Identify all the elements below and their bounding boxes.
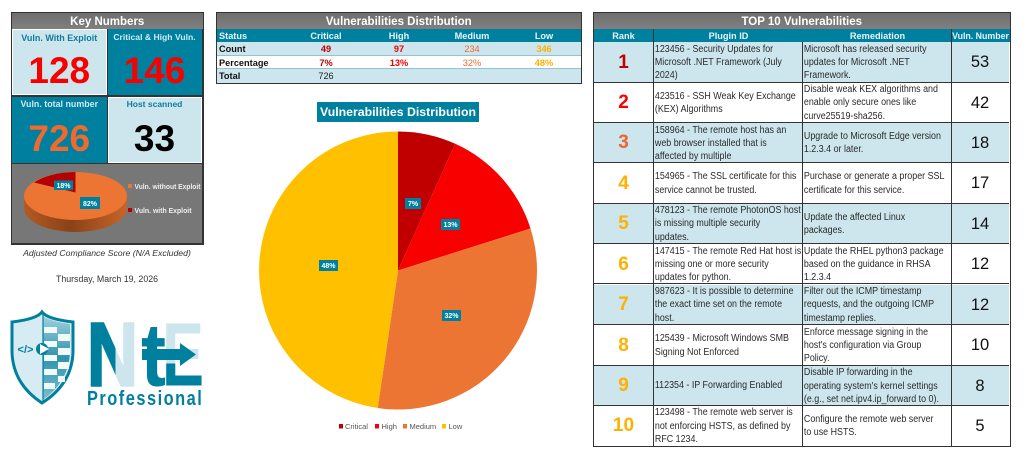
caption: compliance score: Adjusted Compliance Score (N/A Excluded) (23, 248, 191, 258)
row 10: RFC 1234. (655, 434, 698, 445)
table header: Plugin ID (709, 31, 748, 41)
row 1: updates for Microsoft .NET (804, 57, 910, 68)
row 8: Policy. (804, 353, 829, 364)
label: critical and high: Critical & High Vuln. (113, 32, 196, 42)
row 6: 12 (971, 255, 989, 273)
row: count: 234 (464, 44, 480, 54)
row 7: timestamp replies. (804, 313, 876, 324)
heading: distribution table: Vulnerabilities Distribution (326, 16, 472, 28)
row 9: 112354 - IP Forwarding Enabled (655, 380, 782, 391)
wordmark: t: t (141, 306, 166, 406)
row 10: Configure the remote web server (804, 414, 933, 425)
table header: Medium (455, 31, 489, 41)
number: 726: 726 (28, 118, 90, 159)
row: percentage (217, 56, 580, 69)
row 2: 42 (971, 94, 989, 112)
row 6: 1.2.3.4 (804, 272, 831, 283)
heading: top 10 (594, 13, 1010, 28)
row: total: Total (219, 71, 240, 81)
row 10 (594, 406, 1008, 445)
slice: low (259, 132, 398, 408)
label: vuln with exploit: Vuln. With Exploit (21, 33, 97, 43)
row 8: Enforce message signing in the (804, 327, 928, 338)
row 1: 2024) (655, 70, 678, 81)
panel: key numbers (11, 12, 204, 245)
heading: distribution table (217, 13, 580, 28)
row 7 (594, 284, 1008, 325)
data label: 13%: 13% (443, 222, 458, 229)
row 10: to use HSTS. (804, 427, 857, 438)
legend: Critical (345, 422, 368, 431)
row 2: Disable weak KEX algorithms and (804, 84, 938, 95)
chart title (317, 102, 479, 122)
row 1 (594, 42, 1008, 83)
row 6: missing one or more security (655, 259, 769, 270)
card: host scanned (108, 96, 202, 162)
label: host scanned: Host scanned (127, 99, 182, 109)
row 3: 18 (971, 134, 989, 152)
row 8: host's configuration via Group (804, 340, 921, 351)
heading: key numbers: Key Numbers (70, 16, 144, 28)
row 7: 987623 - It is possible to determine (655, 286, 793, 297)
row 8 (594, 325, 1008, 366)
legend (339, 422, 463, 431)
row 8: Signing Not Enforced (655, 347, 739, 358)
row: count (217, 42, 580, 56)
row 9: (e.g., set net.ipv4.ip_forward to 0). (804, 394, 939, 405)
row: percentage: Percentage (219, 58, 269, 68)
row 4: 154965 - The SSL certificate for this (655, 171, 796, 182)
data label: 48% (319, 260, 338, 271)
row 5: Update the affected Linux (804, 212, 905, 223)
row 9: 8 (975, 377, 985, 395)
wordmark: N: N (87, 306, 138, 406)
number: 128: 128 (28, 50, 90, 91)
chart: exploit pie (12, 164, 202, 243)
chart: exploit pie: 18% (56, 183, 71, 190)
table header: Rank (612, 31, 635, 41)
table header: High (389, 31, 409, 41)
row: count: 97 (394, 44, 404, 54)
row 7: the exact time set on the remote (655, 299, 782, 310)
heading: key numbers (12, 13, 202, 28)
row 2: 2 (618, 92, 629, 113)
row 7: requests, and the outgoing ICMP (804, 299, 934, 310)
row 5: is missing multiple security (655, 218, 760, 229)
heading: top 10: TOP 10 Vulnerabilities (741, 16, 862, 28)
icon: shield (12, 312, 73, 403)
row 7: 7 (618, 294, 629, 315)
row 6: Update the RHEL python3 package (804, 246, 944, 257)
row 9: operating system's kernel settings (804, 380, 938, 392)
row 6: updates for python. (655, 272, 731, 283)
row 3: 1.2.3.4 or later. (804, 144, 863, 155)
date: Thursday, March 19, 2026 (56, 274, 158, 284)
row 6: based on the guidance in RHSA (804, 259, 931, 270)
legend: High (382, 422, 397, 431)
number: 146: 146 (124, 50, 185, 91)
row: percentage: 7% (319, 58, 333, 68)
row 4: 4 (618, 173, 629, 194)
chart: exploit pie: 82% (83, 201, 98, 208)
row 3 (594, 123, 1008, 163)
number: 33: 33 (134, 118, 175, 159)
row 2: enable only secure ones like (804, 97, 916, 108)
row 10: not enforcing HSTS, as defined by (655, 421, 790, 432)
row 4: service cannot be trusted. (655, 185, 757, 196)
slice: medium (378, 228, 537, 409)
wordmark: Professional: Professional (87, 386, 202, 409)
legend: Low (448, 422, 463, 431)
legend: Medium (410, 422, 436, 431)
row 4: certificate for this service. (804, 185, 904, 196)
row 4: Purchase or generate a proper SSL (804, 171, 944, 182)
table header: Critical (310, 31, 342, 41)
row 1: 1 (618, 52, 629, 73)
row 9 (594, 366, 1008, 406)
row 1: Microsoft has released security (804, 44, 927, 55)
row 8: 8 (618, 335, 629, 356)
icon: arrow (142, 343, 196, 366)
row 7: 12 (971, 296, 989, 314)
row 10: 5 (975, 417, 985, 435)
card: total number (12, 96, 106, 162)
row 1: 53 (971, 53, 989, 71)
row 1: Microsoft .NET Framework (July (655, 57, 782, 68)
row 2: curve25519-sha256. (804, 111, 885, 122)
row 5 (594, 204, 1008, 244)
row 1: 123456 - Security Updates for (655, 44, 773, 55)
row 8: 125439 - Microsoft Windows SMB (655, 333, 789, 344)
row 9: 9 (618, 375, 629, 396)
row 2: 423516 - SSH Weak Key Exchange (655, 91, 796, 102)
label: total number: Vuln. total number (20, 99, 98, 109)
data label: 7%: 7% (408, 201, 419, 208)
data label: 7% (405, 198, 421, 209)
row 6: 147415 - The remote Red Hat host is (655, 246, 801, 257)
slice: critical (398, 132, 455, 270)
data label: 48%: 48% (321, 263, 336, 270)
table header (217, 28, 580, 42)
row 5: 5 (618, 213, 629, 234)
table header (594, 28, 1010, 42)
row 5: updates. (655, 232, 689, 243)
panel: distribution table (216, 12, 582, 84)
row: total: 726 (318, 71, 334, 81)
data label: 13% (441, 219, 460, 230)
row: percentage: 32% (463, 58, 481, 68)
row 3: Upgrade to Microsoft Edge version (804, 131, 941, 142)
row 7: host. (655, 313, 674, 324)
chart title: Vulnerabilities Distribution (320, 105, 476, 119)
logo: NtE Professional (10, 306, 204, 409)
row 10: 10 (613, 415, 634, 436)
row 3: 3 (618, 132, 629, 153)
panel: top 10 vulnerabilities (593, 12, 1010, 447)
row 8: 10 (971, 336, 989, 354)
row 4 (594, 164, 1008, 204)
row 3: web browser installed that is (655, 138, 767, 149)
row 4: 17 (971, 174, 989, 192)
row 2: (KEX) Algorithms (655, 104, 723, 115)
chart: exploit pie: Vuln. with Exploit (134, 206, 192, 215)
row 5: 14 (971, 215, 989, 233)
row 9: Disable IP forwarding in the (804, 367, 913, 378)
row 6: 6 (618, 254, 629, 275)
icon: shield: </> (18, 344, 33, 356)
row 3: 158964 - The remote host has an (655, 124, 786, 136)
row 10: 123498 - The remote web server is (655, 407, 793, 418)
row: count: Count (219, 44, 246, 54)
row: count: 49 (321, 44, 331, 54)
slice: high (398, 144, 530, 270)
row 5: packages. (804, 225, 844, 236)
data label: 32%: 32% (444, 313, 459, 320)
row: percentage: 13% (390, 58, 408, 68)
row 1: Framework. (804, 70, 851, 81)
row: total (217, 69, 580, 82)
row 3: affected by multiple (655, 151, 731, 162)
card: vuln with exploit (12, 29, 106, 95)
chart: severity pie (259, 132, 537, 410)
row 5: 478123 - The remote PhotonOS host (655, 205, 801, 216)
row: count: 346 (536, 44, 552, 54)
table header: Vuln. Number (952, 31, 1009, 41)
row 6 (594, 244, 1008, 284)
card: critical and high (108, 29, 202, 95)
row 7: Filter out the ICMP timestamp (804, 286, 921, 297)
row 2 (594, 83, 1008, 123)
row: percentage: 48% (535, 58, 553, 68)
table header: Remediation (850, 31, 905, 41)
table header: Low (535, 31, 553, 41)
table header: Status (219, 31, 247, 41)
data label: 32% (442, 310, 461, 321)
